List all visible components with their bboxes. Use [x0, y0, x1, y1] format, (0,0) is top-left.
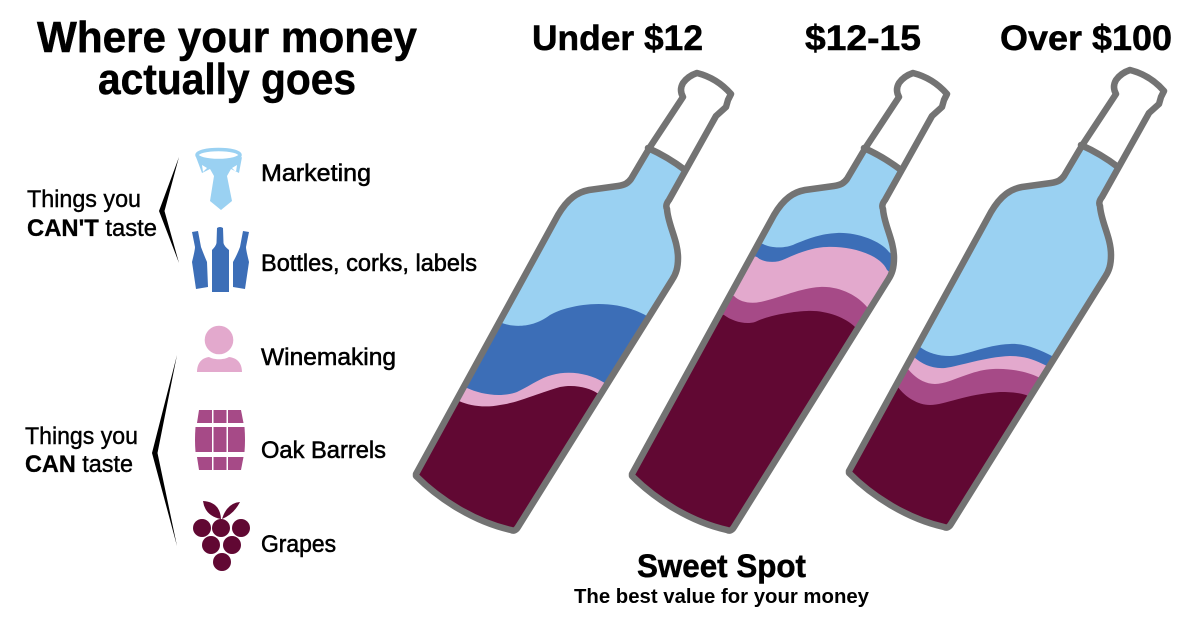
label: grapes: Grapes: [261, 531, 336, 558]
label: oak barrels: Oak Barrels: [261, 437, 386, 464]
bracket: can't taste: [159, 157, 179, 263]
bottle: $12-15: [628, 70, 950, 534]
icon: person (winemaking): [197, 326, 242, 372]
bracket: can taste: [152, 355, 177, 546]
callout: sweet spot: The best value for your money: [574, 586, 870, 608]
group label: things you can taste: Things you: [25, 423, 138, 450]
label: bottles, corks, labels: Bottles, corks, labels: [261, 250, 477, 277]
bottle: under $12: [412, 70, 734, 534]
bottle: over $100: [846, 66, 1168, 531]
heading: $12-15: $12-15: [805, 19, 921, 58]
title: Where your money: [37, 13, 418, 62]
group label: things you can't taste: CAN'T taste: [27, 215, 157, 242]
group label: things you can taste: CAN taste: [25, 451, 133, 478]
title: [37, 13, 418, 104]
label: winemaking: Winemaking: [261, 344, 396, 371]
callout: sweet spot: [574, 548, 870, 608]
group label: things you can't taste: [27, 186, 157, 242]
label: marketing: Marketing: [261, 160, 371, 187]
heading: under $12: Under $12: [532, 19, 703, 58]
group label: things you can taste: [25, 423, 138, 478]
heading: over $100: Over $100: [1000, 19, 1172, 58]
group label: things you can't taste: Things you: [27, 186, 141, 213]
icon: barrel (oak barrels): [195, 410, 245, 470]
title: actually goes: [98, 55, 356, 104]
icon: three bottles (bottles, corks, labels): [192, 227, 249, 292]
icon: necktie (marketing): [196, 150, 242, 210]
icon: grapes: [193, 501, 250, 571]
callout: sweet spot: Sweet Spot: [637, 548, 806, 584]
